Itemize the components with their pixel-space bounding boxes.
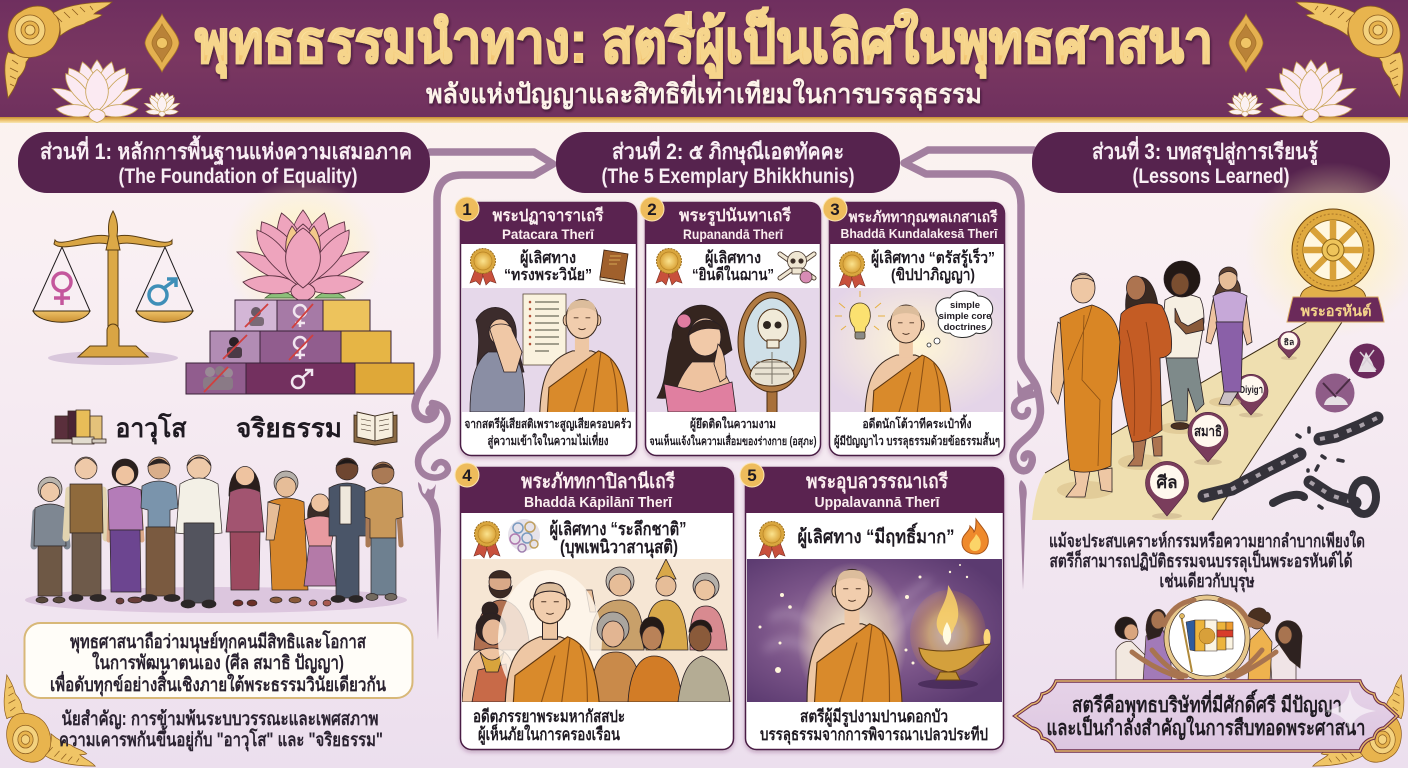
text block: equality statement: เพื่อดับทุกข์อย่างสิ้นเชิงภายใต้พระธรรมวินัยเดียวกัน [50, 670, 386, 697]
illustration: Rupananda at mirror [647, 288, 819, 415]
pin: morality [1146, 461, 1188, 519]
caption: บรรลุธรรมจากการพิจารณาเปลวประทีป [760, 724, 988, 745]
icon: medal [470, 248, 496, 285]
illustration: monk and flame lamp [747, 559, 1002, 702]
icon: dark circle broken shackles [1350, 344, 1384, 378]
figure: crowned royal [646, 559, 688, 650]
pin: precepts small [1278, 331, 1300, 360]
title: excellence [550, 519, 686, 559]
caption: จากสตรีผู้เสียสติเพราะสูญเสียครอบครัว [464, 417, 632, 432]
label: ethics: จริยธรรม [236, 413, 342, 443]
ornament: top-left corner [5, 2, 112, 98]
chart: social stairs pyramid [186, 300, 414, 394]
flag [1180, 614, 1233, 672]
card header: พระปฏาจาราเถรี [492, 205, 604, 225]
icon: light bulb [835, 291, 885, 339]
card header: Bhaddā Kundalakesā Therī [840, 226, 998, 241]
figure: left inner woman [1143, 609, 1172, 682]
card header: Uppalavannā Therī [814, 494, 940, 511]
illustration: past lives [462, 559, 732, 716]
figure: woman in lilac top [1206, 267, 1252, 407]
caption [834, 414, 1000, 449]
callout: conclusion banner: สตรีคือพุทธบริษัทที่มีศักดิ์ศรี มีปัญญา [1072, 689, 1342, 719]
icon: right white lotus [1266, 59, 1356, 123]
section heading: part 1 [18, 132, 430, 193]
figure: man in shirt [678, 620, 730, 702]
number badge 3: 3 [830, 200, 840, 219]
thought cloud [927, 291, 993, 347]
figure: man in ochre shirt [365, 462, 403, 600]
figure: elder woman in pink [690, 573, 727, 650]
icon: flame [962, 519, 988, 554]
figure: young nun [628, 617, 682, 702]
text block: equality statement [24, 623, 412, 698]
label: seniority: อาวุโส [116, 412, 187, 445]
title: excellence: ผู้เลิศทาง “ระลึกชาติ” [550, 519, 686, 541]
icon: male symbol [292, 370, 312, 388]
caption: อดีตนักโต้วาทีคระเป๋าทิ้ง [862, 414, 972, 431]
section heading: part 1: ส่วนที่ 1: หลักการพื้นฐานแห่งความเสมอภาค [40, 135, 412, 166]
section heading: part 2 [556, 132, 900, 193]
document [523, 294, 566, 365]
figure: man in white shirt [176, 455, 222, 608]
caption [464, 417, 632, 449]
pin: wisdom: Oiyigา [1239, 385, 1263, 396]
title: excellence: ผู้เลิศทาง [705, 249, 761, 269]
icon: broken chains [1204, 418, 1377, 514]
icon: light circle broken shackles [1316, 374, 1354, 412]
ornament: bottom-right corner [1313, 675, 1404, 766]
section heading: part 2: ส่วนที่ 2: ๕ ภิกษุณีเอตทัคคะ [612, 135, 844, 166]
caption [760, 706, 988, 745]
figure: elder in tan robe [586, 567, 644, 650]
panel: card 4 Bhadda Kapilani [455, 463, 734, 750]
figure: nun in rust robe [1118, 276, 1172, 470]
caption: ผู้เห็นภัยในการครองเรือน [478, 722, 620, 746]
figure: woman with gold necklace [462, 602, 512, 702]
thought cloud: doctrines [944, 322, 986, 333]
label plaque: arahant [1287, 297, 1384, 322]
number badge 2: 2 [647, 200, 657, 219]
panel: card 2 Rupananda [640, 197, 821, 456]
section heading: part 1: (The Foundation of Equality) [118, 165, 358, 188]
figure: grieving woman [470, 307, 524, 412]
icon: skull, bones and flower [780, 252, 814, 283]
title: excellence: ผู้เลิศทาง “มีฤทธิ์มาก” [798, 522, 954, 549]
pin: concentration [1188, 412, 1228, 465]
card header: Bhaddā Kāpilānī Therī [524, 494, 673, 511]
header banner [0, 0, 1408, 123]
panel: card 5 Uppalavanna [740, 463, 1004, 750]
figure: left outer woman [1115, 617, 1150, 682]
mirror with skeleton [738, 292, 806, 415]
card header: Rupanandā Therī [683, 226, 784, 242]
text block: equality statement: พุทธศาสนาถือว่ามนุษย์ทุกคนมีสิทธิและโอกาส [70, 630, 366, 654]
figure: right outer woman [1270, 621, 1302, 682]
card header [829, 202, 1005, 244]
figure: central monk [505, 582, 600, 716]
caption: สู่ความเข้าใจในความไม่เที่ยง [488, 432, 608, 449]
connector: section flow lines [415, 150, 1040, 478]
connector: right spikes [1017, 378, 1036, 400]
icon: sparkle [1324, 688, 1376, 734]
text block: lesson statement: เช่นเดียวกับบุรุษ [1160, 571, 1255, 593]
figure: elderly nun in orange robe [266, 471, 308, 603]
title: excellence: ผู้เลิศทาง “ตรัสรู้เร็ว” [871, 246, 995, 269]
icon: vinaya book [600, 250, 628, 284]
title: excellence: (บุพเพนิวาสานุสติ) [560, 537, 678, 559]
caption: สตรีผู้มีรูปงามปานดอกบัว [800, 706, 948, 728]
figure: woman in burgundy jacket [226, 466, 264, 606]
figure: elderly man with vest [66, 457, 106, 602]
icon: open book [354, 412, 397, 445]
figure: woman in white shirt [1160, 261, 1204, 434]
section heading: part 3: (Lessons Learned) [1132, 165, 1290, 188]
title: excellence: “ทรงพระวินัย” [504, 266, 592, 284]
aura wisps [765, 580, 945, 665]
figure: woman [657, 305, 736, 412]
figure: monk [864, 304, 952, 412]
title: excellence [504, 249, 592, 284]
card header [645, 202, 821, 244]
icon: right small lotus [1227, 92, 1263, 117]
icon: male symbol [149, 279, 176, 304]
card header: พระภัททกาปิลานีเถรี [521, 470, 675, 493]
number badge 1 [455, 197, 479, 221]
icon: left small lotus [144, 92, 180, 117]
subtitle: พลังแห่งปัญญาและสิทธิที่เท่าเทียมในการบรรลุธรรม [426, 74, 982, 111]
thought cloud: simple [950, 300, 980, 311]
caption: อดีตภรรยาพระมหากัสสปะ [473, 706, 625, 726]
pin: wisdom [1234, 374, 1268, 418]
figure: girl in pink [304, 494, 336, 606]
number badge 5: 5 [747, 466, 757, 485]
sparkles [758, 564, 968, 673]
icon: oil lamp with flame [910, 585, 990, 689]
section heading: part 3: ส่วนที่ 3: บทสรุปสู่การเรียนรู้ [1092, 135, 1318, 166]
panel: lessons learned [1015, 162, 1408, 751]
card header: Patacara Therī [502, 226, 595, 242]
caption [650, 416, 817, 449]
figure: bearded man [474, 570, 530, 650]
figure: monk in orange robe [1051, 273, 1120, 499]
section heading: part 3 [1032, 132, 1390, 193]
card header: พระภัททากุณฑลเกสาเถรี [848, 209, 998, 227]
icon: dharma wheel with rays [1245, 162, 1408, 338]
card header [745, 467, 1004, 513]
text block: lesson statement [1049, 530, 1365, 593]
pin: morality: ศีล [1156, 472, 1178, 492]
ornament: left diamond [145, 14, 179, 72]
illustration: four women holding Buddhist flag [1115, 595, 1302, 682]
pin: concentration: สมาธิ [1194, 423, 1222, 439]
flag ring [1164, 595, 1250, 681]
figure: monk [540, 300, 629, 425]
figure: elderly woman [34, 477, 67, 603]
illustration: monk with light bulb and thought [831, 288, 1003, 412]
panel: card 3 Bhadda Kundalakesa [823, 197, 1005, 456]
pin: precepts small: ธิล [1284, 337, 1294, 347]
title: excellence: (ขิปปาภิญญา) [891, 266, 975, 285]
path to arahantship [1032, 322, 1342, 520]
label plaque: arahant: พระอรหันต์ [1300, 302, 1372, 320]
connector: right tapered tail [1019, 480, 1027, 590]
number badge 1: 1 [462, 200, 472, 219]
card header [460, 202, 637, 244]
text block: key message [59, 708, 383, 752]
icon: stack of books [52, 410, 106, 444]
thought cloud: simple core [939, 311, 991, 322]
caption: ผู้ยึดติดในความงาม [690, 416, 776, 432]
panel: card 1 Patacara [455, 197, 637, 456]
title: พุทธธรรมนำทาง: สตรีผู้เป็นเลิศในพุทธศาสนา [195, 7, 1213, 79]
text block: key message: นัยสำคัญ: การข้ามพ้นระบบวรรณะและเพศสภาพ [62, 708, 378, 730]
number badge 5 [740, 463, 764, 487]
icon: rebirth spirals [508, 519, 540, 552]
connector: left tapered tail [418, 482, 441, 640]
number badge 4: 4 [462, 466, 472, 485]
ornament: right diamond [1229, 14, 1263, 72]
icon: balance scale [33, 211, 193, 365]
panel: foundation of equality [24, 177, 414, 752]
icon: medal [474, 522, 500, 558]
icon: medal [759, 522, 785, 558]
number badge 4 [455, 463, 479, 487]
section heading: part 2: (The 5 Exemplary Bhikkhunis) [602, 165, 854, 188]
illustration: Patacara with monk [462, 288, 635, 425]
ornament: bottom-left corner [4, 675, 95, 766]
icon: left white lotus [52, 59, 142, 123]
figure: elder woman in robe [594, 612, 636, 702]
title: excellence [692, 249, 774, 284]
callout: conclusion banner [1015, 681, 1397, 751]
card header: พระรูปนันทาเถรี [679, 205, 792, 227]
number badge 2 [640, 197, 664, 221]
strike-throughs [204, 304, 313, 392]
card header [460, 467, 734, 513]
figure: right inner woman [1248, 608, 1272, 682]
figure: man in blue shirt [141, 457, 180, 602]
card header: พระอุบลวรรณาเถรี [806, 470, 948, 494]
icon: medal [656, 248, 682, 285]
caption: ผู้มีปัญญาไว บรรลุธรรมด้วยข้อธรรมสั้นๆ [834, 431, 1000, 449]
illustration: diverse community of ten people [25, 455, 407, 613]
caption [473, 706, 625, 746]
title: excellence: “ยินดีในฌาน” [692, 265, 774, 284]
title: excellence: ผู้เลิศทาง [520, 249, 576, 269]
glow [498, 570, 602, 680]
figure: man in dark suit [329, 458, 366, 602]
icon: female symbol middle [294, 337, 306, 359]
text block: equality statement: ในการพัฒนาตนเอง (ศีล สมาธิ ปัญญา) [92, 651, 344, 674]
title: excellence [871, 246, 995, 285]
ornament: top-right corner [1296, 2, 1403, 98]
arms around ring [1132, 600, 1276, 678]
icon: female symbol top [294, 305, 306, 327]
icon: pink lotus with rays [225, 177, 381, 333]
figure: woman in purple skirt [108, 459, 143, 604]
caption: จนเห็นแจ้งในความเสื่อมของร่างกาย (อสุภะ) [650, 432, 817, 449]
number badge 3 [823, 197, 847, 221]
icon: female symbol [53, 273, 71, 305]
icon: medal [839, 252, 865, 288]
figure: monk [807, 569, 902, 702]
text block: key message: ความเคารพกันขึ้นอยู่กับ "อาวุโส" และ "จริยธรรม" [59, 725, 383, 752]
icon: crossed out people [203, 307, 264, 390]
